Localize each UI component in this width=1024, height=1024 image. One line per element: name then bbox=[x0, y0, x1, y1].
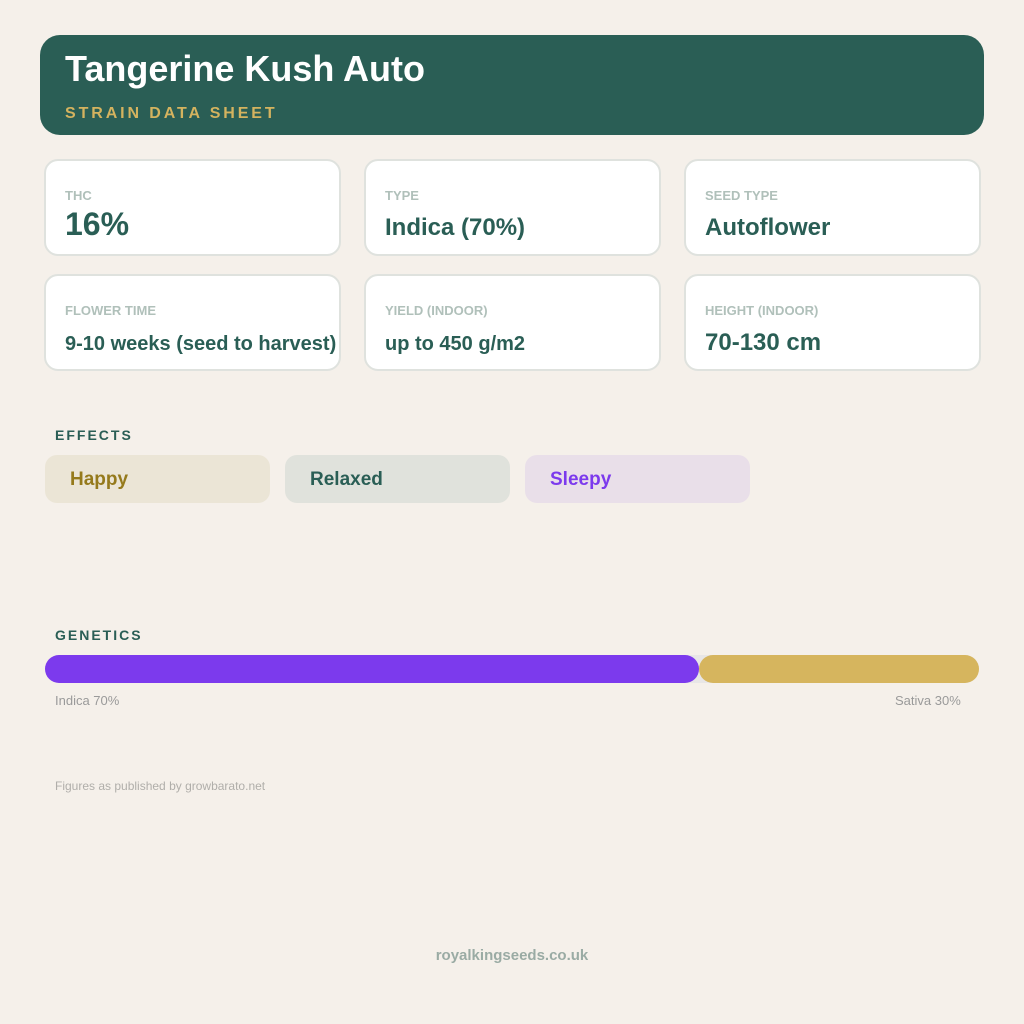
label: sativa share: Sativa 30% bbox=[895, 693, 961, 708]
card: yield bbox=[364, 274, 661, 371]
value: flower time: 9-10 weeks (seed to harvest) bbox=[65, 333, 336, 355]
value: height: 70-130 cm bbox=[705, 329, 821, 356]
card: type bbox=[364, 159, 661, 256]
label: type: TYPE bbox=[385, 188, 419, 203]
value: THC: 16% bbox=[65, 206, 129, 242]
card: flower time bbox=[44, 274, 341, 371]
pill: relaxed bbox=[285, 455, 510, 503]
subtitle: STRAIN DATA SHEET bbox=[65, 105, 278, 122]
value: yield: up to 450 g/m2 bbox=[385, 333, 525, 355]
genetics bar bbox=[45, 655, 979, 683]
header banner bbox=[40, 35, 984, 135]
pill: happy bbox=[45, 455, 270, 503]
pill: happy: Happy bbox=[70, 469, 128, 490]
bar segment: sativa bbox=[699, 655, 979, 683]
label: height: HEIGHT (INDOOR) bbox=[705, 303, 818, 318]
label: THC: THC bbox=[65, 188, 92, 203]
label: indica share: Indica 70% bbox=[55, 693, 119, 708]
title: Tangerine Kush Auto bbox=[65, 48, 425, 89]
label: seed type: SEED TYPE bbox=[705, 188, 778, 203]
source note: Figures as published by growbarato.net bbox=[55, 779, 265, 793]
heading: genetics: GENETICS bbox=[55, 627, 143, 643]
pill: sleepy: Sleepy bbox=[550, 469, 611, 490]
label: flower time: FLOWER TIME bbox=[65, 303, 156, 318]
card: height bbox=[684, 274, 981, 371]
card: seed type bbox=[684, 159, 981, 256]
bar segment: indica bbox=[45, 655, 699, 683]
value: seed type: Autoflower bbox=[705, 214, 830, 241]
footer site name: royalkingseeds.co.uk bbox=[436, 947, 588, 964]
card: THC bbox=[44, 159, 341, 256]
pill: relaxed: Relaxed bbox=[310, 469, 383, 490]
label: yield: YIELD (INDOOR) bbox=[385, 303, 488, 318]
value: type: Indica (70%) bbox=[385, 214, 525, 241]
pill: sleepy bbox=[525, 455, 750, 503]
heading: effects: EFFECTS bbox=[55, 427, 133, 443]
